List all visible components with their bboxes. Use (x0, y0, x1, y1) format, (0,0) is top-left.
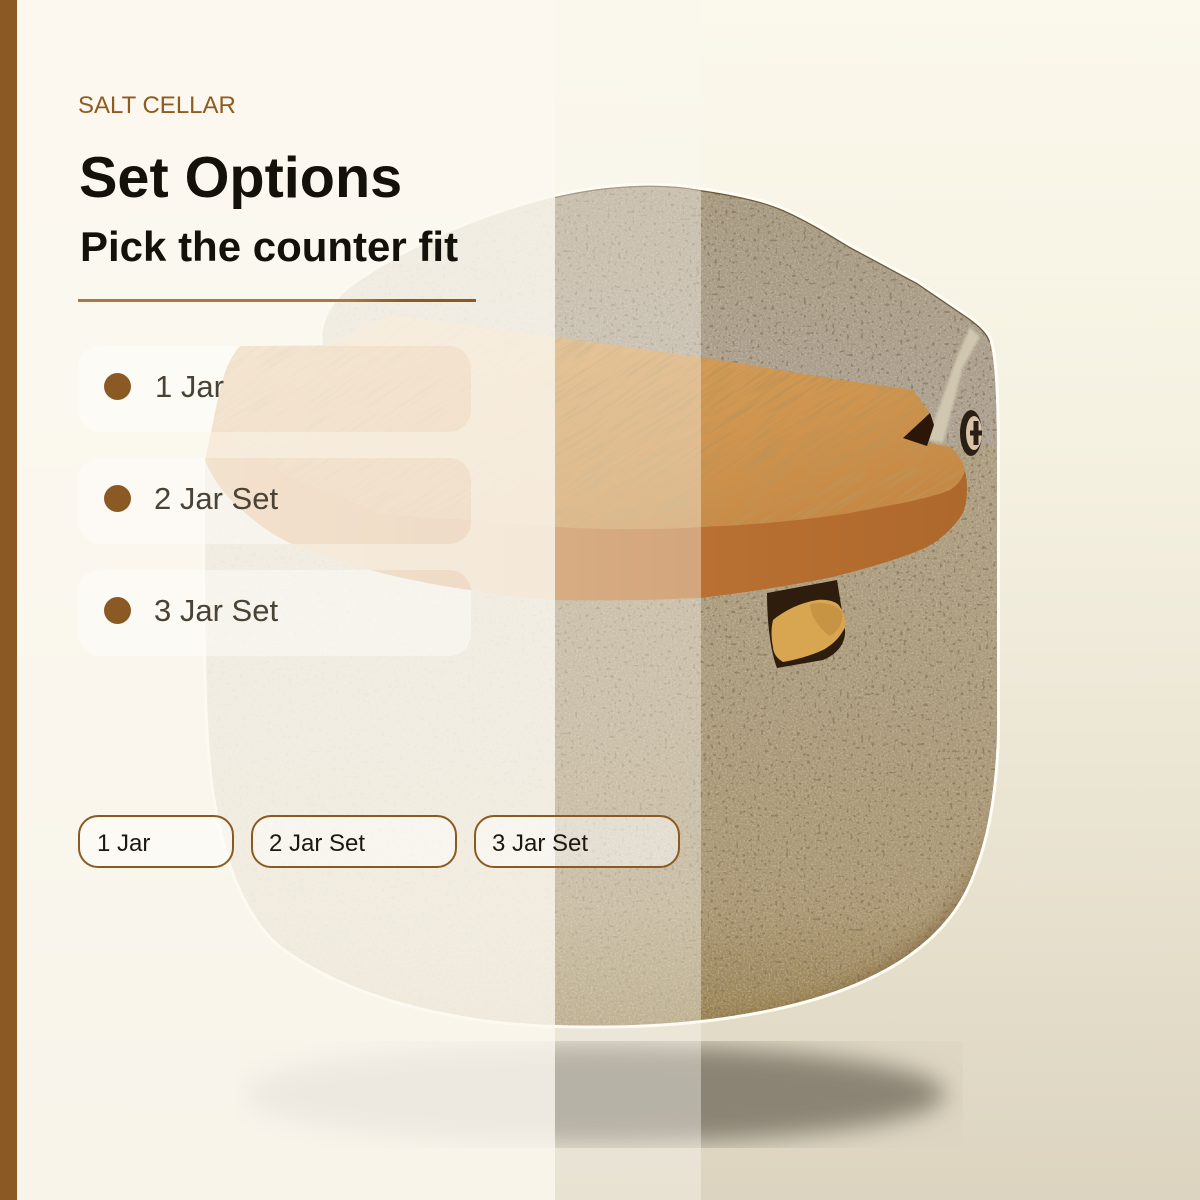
option row: 3 Jar Set (78, 570, 471, 656)
lid top (213, 318, 965, 530)
ceramic speckles (555, 188, 997, 1026)
jar white cut-out halo (205, 186, 997, 1025)
lid (205, 318, 967, 600)
spoon hollow (810, 603, 842, 636)
lid tint showing through the option rows (205, 346, 471, 590)
title: Set Options (79, 146, 402, 210)
option text: 2 Jar Set: 2 Jar Set (154, 481, 278, 516)
option row: 1 Jar (78, 346, 471, 432)
jar (205, 183, 1000, 1028)
left accent bar (0, 0, 17, 1200)
bullet (104, 597, 131, 624)
ground shadow (236, 1041, 963, 1148)
wood grain (214, 338, 964, 527)
jar body (190, 170, 1015, 1045)
bullet (104, 485, 131, 512)
inner rim highlight (927, 327, 980, 443)
lid notch (903, 413, 934, 446)
translucent panel: left (0, 0, 555, 1200)
option text: 1 Jar: 1 Jar (155, 369, 224, 404)
ceramic mottling (555, 187, 997, 1026)
button: 2 Jar Set (251, 815, 457, 868)
button: 3 Jar Set (474, 815, 680, 868)
button: 1 Jar: 1 Jar (97, 830, 150, 857)
option text: 3 Jar Set: 3 Jar Set (154, 593, 278, 628)
translucent band: mid (555, 0, 701, 1200)
eyebrow label: SALT CELLAR (78, 92, 236, 119)
top rim line (555, 186, 990, 342)
button: 1 Jar (78, 815, 234, 868)
option row: 2 Jar Set (78, 458, 471, 544)
spoon slot (767, 580, 845, 668)
screw (960, 410, 982, 456)
divider rule (78, 299, 476, 302)
back wall (556, 186, 997, 445)
button: 2 Jar Set: 2 Jar Set (269, 830, 365, 857)
bullet (104, 373, 131, 400)
lid side (205, 423, 967, 600)
spoon (772, 600, 845, 662)
lower rim darkening (729, 828, 986, 1016)
button: 3 Jar Set: 3 Jar Set (492, 830, 588, 857)
subtitle: Pick the counter fit (80, 223, 458, 270)
